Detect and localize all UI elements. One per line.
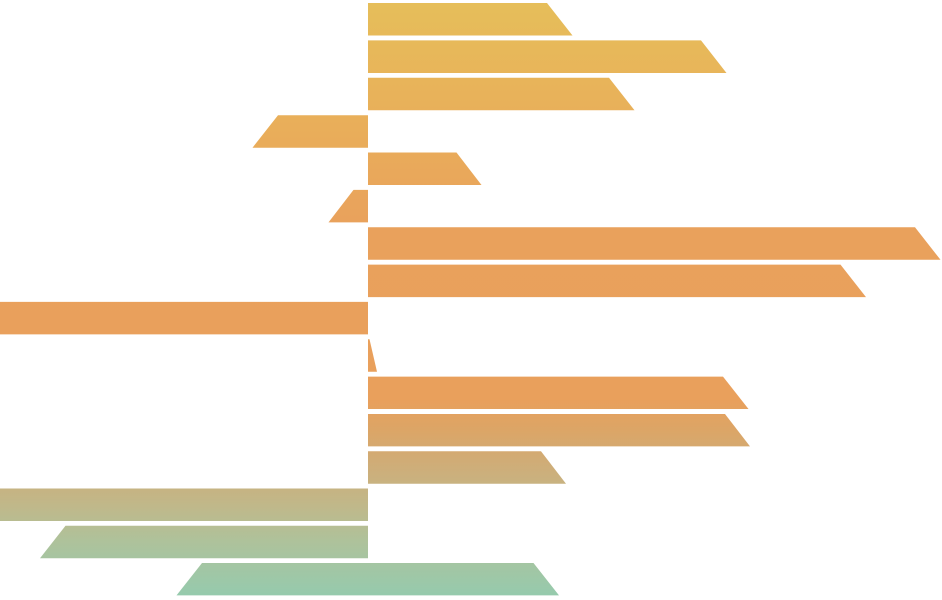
bar 7: [368, 227, 940, 260]
bar 11: [368, 377, 748, 409]
bar 1: [368, 3, 572, 36]
bar 10: [368, 339, 377, 372]
bar 14: [0, 488, 368, 521]
bar 13: [368, 451, 566, 484]
bar 12: [368, 414, 750, 446]
bar 8: [368, 265, 866, 297]
bar 16: [176, 563, 559, 595]
bar 6: [328, 190, 368, 222]
bar 5: [368, 152, 482, 185]
bar 3: [368, 78, 634, 110]
bar 2: [368, 40, 726, 73]
bar 4: [252, 115, 368, 148]
bar 15: [40, 526, 368, 558]
bar 9: [0, 302, 368, 334]
